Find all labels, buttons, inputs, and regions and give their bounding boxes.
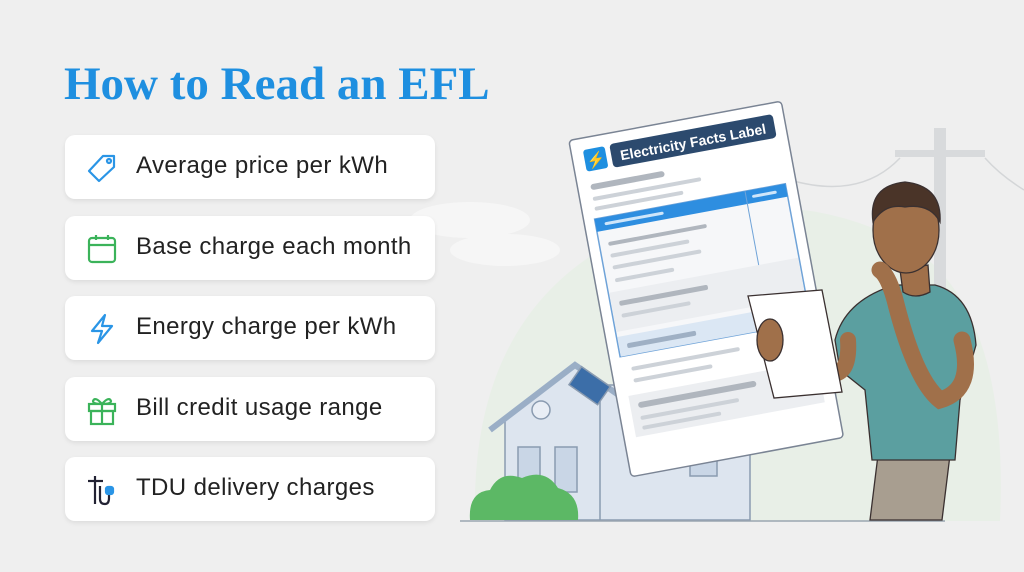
icon: gift [88, 398, 116, 426]
document: Electricity Facts Label: Electricity Facts Label [619, 121, 767, 163]
document: Electricity Facts Label [569, 101, 844, 477]
person [790, 182, 976, 520]
card: average price [65, 135, 435, 199]
card: bill credit: Bill credit usage range [136, 394, 383, 421]
icon: price tag [88, 154, 116, 182]
card: bill credit [65, 377, 435, 441]
ground line [460, 520, 945, 522]
icon: calendar [88, 235, 116, 264]
background blob [410, 202, 1001, 521]
icon: lightning [90, 314, 114, 344]
card: TDU delivery [65, 457, 435, 521]
card: base charge: Base charge each month [136, 233, 412, 260]
house [490, 365, 750, 520]
card: energy charge: Energy charge per kWh [136, 313, 397, 340]
card: average price: Average price per kWh [136, 152, 388, 179]
document: Electricity Facts Label: ⚡ [585, 149, 607, 170]
held paper and hand [748, 290, 842, 398]
card: base charge [65, 216, 435, 280]
utility pole [790, 128, 1024, 308]
icon: pole plug [88, 476, 114, 506]
bush [470, 475, 578, 520]
card: TDU delivery: TDU delivery charges [136, 474, 375, 501]
title: How to Read an EFL [64, 58, 490, 110]
card: energy charge [65, 296, 435, 360]
